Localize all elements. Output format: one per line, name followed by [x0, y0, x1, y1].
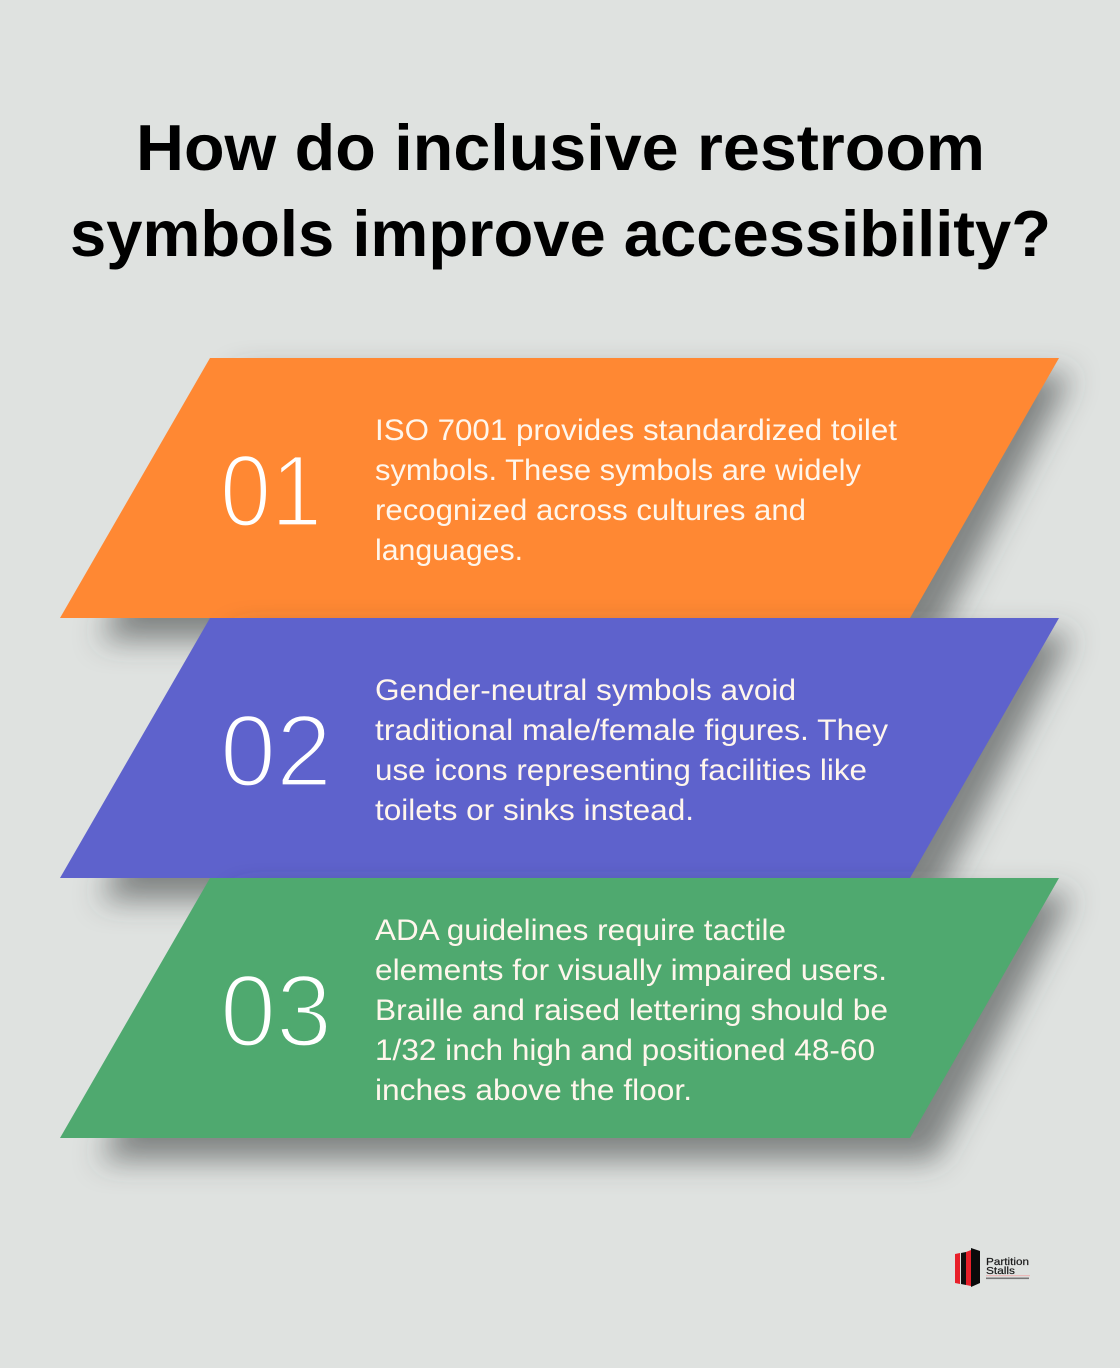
title: symbols improve accessibility?	[70, 197, 1051, 270]
panel 02 shadow	[100, 634, 1072, 900]
logo icon: stall panels	[955, 1248, 980, 1287]
panel 03 text: 1/32 inch high and positioned 48-60	[375, 1034, 875, 1067]
panel 02 text: use icons representing facilities like	[375, 754, 867, 787]
panel 03: ADA guidelines	[60, 878, 1072, 1160]
title	[70, 111, 1051, 270]
panel 01 shadow	[100, 374, 1072, 640]
panel 02 number: 02	[220, 694, 332, 808]
panel 02: gender-neutral symbols	[60, 618, 1072, 900]
panel 02 text: traditional male/female figures. They	[375, 714, 888, 747]
panel 01 number: 01	[220, 434, 322, 548]
panel 03 number: 03	[220, 954, 332, 1068]
panel 01 background	[60, 358, 1059, 618]
panel 01 text: recognized across cultures and	[375, 494, 806, 527]
panel 01: ISO 7001	[60, 358, 1072, 640]
panel 03 text: Braille and raised lettering should be	[375, 994, 888, 1027]
panel 03 text: inches above the floor.	[375, 1074, 692, 1107]
logo wordmark: Stalls	[986, 1265, 1015, 1277]
panel 02 background	[60, 618, 1059, 878]
panel 03 text	[375, 914, 888, 1107]
panel 02 text	[375, 674, 888, 827]
panel 01 text	[375, 414, 897, 567]
logo wordmark: Partition	[986, 1256, 1029, 1268]
logo wordmark	[986, 1256, 1030, 1279]
panel 03 text: elements for visually impaired users.	[375, 954, 887, 987]
panel 03 shadow	[100, 894, 1072, 1160]
logo: Partition Stalls	[955, 1248, 1030, 1287]
panel 01 text: ISO 7001 provides standardized toilet	[375, 414, 897, 447]
panel 01 text: symbols. These symbols are widely	[375, 454, 861, 487]
title: How do inclusive restroom	[136, 111, 985, 184]
panel 03 background	[60, 878, 1059, 1138]
panel 02 text: Gender-neutral symbols avoid	[375, 674, 796, 707]
panel 02 text: toilets or sinks instead.	[375, 794, 694, 827]
panel 03 text: ADA guidelines require tactile	[375, 914, 786, 947]
panel 01 text: languages.	[375, 534, 523, 567]
